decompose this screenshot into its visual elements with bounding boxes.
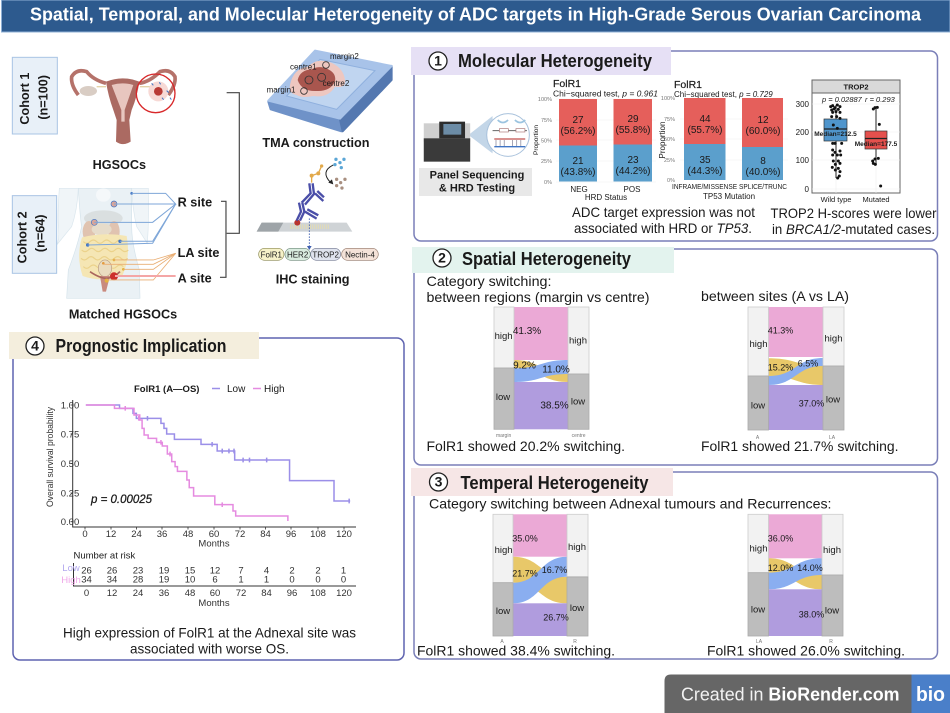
sankey: A vs LA: 15.2%	[768, 362, 793, 372]
sankey: A vs R: 16.7%	[542, 565, 567, 575]
bar chart: FolR1 by HRD status: 75%	[541, 118, 552, 124]
icon: tissue microarray block: margin2	[330, 52, 359, 61]
table: number at risk: 26	[81, 566, 92, 576]
line chart: overall survival	[45, 400, 356, 550]
table: number at risk: Low	[62, 563, 80, 574]
label: panel sequencing and HRD testing	[419, 168, 532, 196]
line chart: overall survival: 0.50	[61, 459, 79, 470]
sankey: A vs R: high	[495, 545, 513, 556]
table: number at risk: 36	[159, 588, 169, 599]
icon: tissue microarray block	[267, 51, 392, 131]
bar chart: FolR1 by HRD status: NEG	[570, 185, 588, 194]
table: number at risk: 84	[261, 588, 272, 599]
heading: molecular heterogeneity: Molecular Heterogeneity	[458, 51, 652, 71]
bar chart: FolR1 by TP53 mutation: (40.0%)	[745, 167, 781, 178]
bar chart: FolR1 by HRD status: 27	[572, 115, 584, 126]
markers: FolR1 HER2 TROP2 Nectin-4: HER2	[287, 250, 309, 259]
box plot: TROP2 H-scores: 100	[796, 156, 810, 165]
label: panel sequencing and HRD testing: Panel Sequencing	[430, 170, 524, 182]
line chart: overall survival: 96	[286, 529, 296, 540]
sankey: margin vs centre: centre	[572, 433, 586, 439]
table: number at risk: 19	[159, 566, 169, 576]
line chart: overall survival: 36	[157, 529, 167, 540]
box plot: TROP2 H-scores: p = 0.02887	[821, 95, 863, 104]
table: number at risk: 1	[264, 574, 269, 586]
bar chart: FolR1 by HRD status: (56.2%)	[560, 126, 596, 137]
sankey: margin vs centre: high	[569, 336, 587, 346]
bar chart: FolR1 by TP53 mutation: 50%	[664, 137, 675, 143]
bar chart: FolR1 by HRD status: Chi−squared test, p = 0.961	[553, 88, 658, 98]
table: number at risk: 108	[310, 588, 326, 599]
line chart: overall survival: 72	[235, 529, 245, 540]
sankey: LA vs R: low	[751, 604, 765, 616]
bar chart: FolR1 by TP53 mutation: 25%	[664, 158, 675, 164]
table: number at risk: 0	[341, 574, 346, 586]
table: number at risk: 7	[238, 566, 244, 576]
cohort 1 label: (n=100)	[36, 75, 50, 120]
panel: study design	[12, 51, 392, 322]
sankey: A vs R: 21.7%	[512, 568, 538, 578]
label: IHC staining: IHC staining	[276, 273, 350, 287]
sankey: margin vs centre: 38.5%	[540, 400, 569, 412]
text: ADC target expression: ADC target expression was not	[572, 204, 755, 220]
bar chart: FolR1 by HRD status: (44.2%)	[615, 166, 651, 177]
line chart: overall survival: 84	[260, 529, 271, 540]
table: number at risk: 96	[287, 588, 297, 599]
bar chart: FolR1 by TP53 mutation: (60.0%)	[745, 126, 781, 137]
markers: FolR1 HER2 TROP2 Nectin-4: FolR1	[261, 250, 283, 259]
table: number at risk: 34	[107, 574, 117, 586]
label: panel sequencing and HRD testing: & HRD Testing	[439, 182, 515, 194]
sankey: A vs LA: LA	[829, 435, 836, 441]
heading: prognostic implication	[9, 332, 259, 359]
text: category switching between regions: between regions (margin vs centre)	[426, 289, 650, 305]
sankey: LA vs R: 12.0%	[768, 563, 793, 573]
sankey: A vs R: 35.0%	[512, 534, 538, 544]
bar chart: FolR1 by TP53 mutation: 8	[760, 156, 766, 167]
table: number at risk: 12	[210, 566, 220, 576]
connector lines to LA site	[103, 253, 176, 280]
icon: uterus with ovarian tumour	[72, 71, 175, 144]
sankey: A vs LA: high	[825, 334, 842, 344]
heading: temperal heterogeneity: 3	[435, 474, 443, 490]
text: worse OS conclusion	[63, 624, 356, 656]
line chart: overall survival: 0	[82, 529, 88, 540]
bar chart: FolR1 by TP53 mutation: TP53 Mutation	[703, 192, 755, 201]
label: HGSOCs: HGSOCs	[93, 158, 146, 172]
cohort 2 label: (n=64)	[33, 214, 47, 252]
table: number at risk: 12	[107, 588, 117, 599]
sankey: LA vs R: low	[825, 606, 839, 616]
text: worse OS conclusion: High expression of FolR1 at the Adnexal site was	[63, 624, 356, 640]
markers: FolR1 HER2 TROP2 Nectin-4	[259, 248, 378, 260]
sankey: A vs R: R	[573, 639, 577, 645]
bar chart: FolR1 by TP53 mutation: 12	[757, 115, 769, 126]
heading: spatial heterogeneity	[412, 247, 674, 273]
box plot: TROP2 H-scores: Mutated	[862, 195, 890, 204]
bar chart: FolR1 by TP53 mutation: INFRAME/MISSENSE SPLICE/TRUNC	[672, 184, 787, 191]
bar chart: FolR1 by TP53 mutation: 35	[699, 155, 711, 166]
legend: FolR1 A-OS	[134, 384, 285, 395]
panel: molecular heterogeneity	[411, 47, 938, 241]
sankey: A vs LA: high	[750, 339, 767, 350]
sankey: A vs R	[493, 514, 588, 645]
table: number at risk: 23	[133, 566, 143, 576]
table: number at risk	[61, 550, 356, 609]
text: category switching adnexal recurrences: Category switching between Adnexal tumours and Recurrences:	[429, 496, 832, 512]
box plot: TROP2 H-scores: 0	[805, 185, 810, 194]
sankey: LA vs R	[748, 514, 843, 645]
table: number at risk: 10	[185, 574, 195, 586]
heading: spatial heterogeneity: Spatial Heterogeneity	[462, 249, 631, 269]
bracket: cohorts to methods	[227, 93, 239, 233]
sankey: A vs LA: 41.3%	[768, 326, 793, 336]
legend: FolR1 A-OS: Low	[227, 384, 246, 395]
panel: prognostic implication	[9, 332, 404, 660]
heading: molecular heterogeneity	[411, 47, 671, 75]
text: between sites: between sites (A vs LA)	[701, 288, 849, 304]
title: Spatial, Temporal, and Molecular Heterogeneity of ADC targets in High-Grade Serous Ovarian Carcinoma	[30, 4, 922, 24]
bar chart: FolR1 by HRD status: 23	[627, 155, 639, 166]
label: R site: R site	[178, 195, 212, 209]
text: category switching between regions: Category switching:	[426, 273, 552, 289]
text: FolR1 21.7% switching: FolR1 showed 21.7% switching.	[701, 438, 898, 454]
bar chart: FolR1 by HRD status: POS	[624, 185, 640, 194]
line chart: overall survival: 24	[131, 529, 142, 540]
table: number at risk: Number at risk	[74, 550, 136, 562]
bar chart: FolR1 by TP53 mutation: Proportion	[658, 122, 667, 158]
heading: spatial heterogeneity: 2	[438, 250, 446, 266]
cohort 1 label	[12, 57, 57, 134]
text: ADC target expression	[572, 204, 755, 236]
sankey: margin vs centre: 41.3%	[513, 326, 541, 337]
table: number at risk: 34	[81, 574, 92, 586]
icon: tissue microarray block: margin1	[267, 86, 296, 95]
bar chart: FolR1 by TP53 mutation: 100%	[661, 96, 675, 102]
table: number at risk: 6	[212, 574, 218, 586]
table: number at risk: 0	[315, 574, 321, 586]
line chart: overall survival: 0.75	[61, 430, 79, 440]
badge: created in BioRender	[664, 674, 950, 713]
bar chart: FolR1 by TP53 mutation: FolR1	[674, 79, 702, 91]
icon: tissue microarray block: centre2	[323, 79, 350, 88]
icon: body with tumour sites	[57, 188, 149, 298]
bar chart: FolR1 by HRD status: (55.8%)	[615, 125, 651, 136]
table: number at risk: 4	[264, 566, 269, 576]
bar chart: FolR1 by HRD status	[533, 78, 658, 202]
line chart: overall survival: 0.25	[61, 488, 79, 500]
heading: molecular heterogeneity: 1	[434, 52, 442, 68]
box plot: TROP2 H-scores: Median=212.5	[814, 131, 857, 138]
line chart: overall survival: 108	[310, 529, 326, 540]
text: TROP2 H-scores	[770, 205, 937, 237]
bar chart: FolR1 by HRD status: Proportion	[533, 125, 540, 155]
sankey: margin vs centre	[494, 307, 589, 439]
box plot: TROP2 H-scores: 200	[796, 128, 810, 137]
sankey: A vs LA: low	[826, 394, 840, 406]
bar chart: FolR1 by TP53 mutation: 75%	[664, 117, 675, 123]
panel: temporal heterogeneity	[411, 468, 938, 659]
text: ADC target expression: associated with HRD or TP53.	[574, 220, 752, 236]
sankey: LA vs R: high	[823, 545, 841, 556]
icon: tissue microarray block: centre1	[290, 62, 317, 71]
line chart: overall survival: 48	[183, 529, 193, 540]
text: TROP2 H-scores: in BRCA1/2-mutated cases.	[772, 221, 935, 237]
box plot: TROP2 H-scores: 300	[796, 100, 810, 109]
bar chart: FolR1 by HRD status: 50%	[541, 138, 552, 144]
table: number at risk: 2	[315, 566, 321, 576]
line chart: overall survival: p = 0.00025	[90, 494, 153, 506]
table: number at risk: 120	[336, 588, 352, 599]
bar chart: FolR1 by HRD status: 21	[572, 156, 584, 167]
sankey: LA vs R: high	[750, 544, 767, 554]
table: number at risk: 15	[185, 566, 195, 576]
bracket: sites	[220, 201, 226, 277]
line chart: overall survival: 120	[336, 529, 352, 540]
line chart: overall survival: 1.00	[61, 400, 79, 412]
text: FolR1 26.0% switching: FolR1 showed 26.0% switching.	[707, 642, 905, 658]
table: number at risk: 72	[236, 588, 246, 599]
text: FolR1 20.2% switching: FolR1 showed 20.2% switching.	[426, 438, 625, 454]
bar chart: FolR1 by HRD status: (43.8%)	[560, 167, 596, 178]
badge: created in BioRender: Created in BioRender.com	[681, 684, 900, 704]
box plot: TROP2 H-scores: TROP2	[843, 82, 869, 92]
table: number at risk: 19	[159, 574, 169, 586]
heading: prognostic implication: Prognostic Implication	[56, 336, 226, 356]
sankey: A vs LA: A	[756, 435, 760, 441]
icon: sequencing instrument	[424, 114, 529, 162]
sankey: margin vs centre: high	[495, 331, 513, 342]
table: number at risk: 48	[185, 588, 195, 599]
text: FolR1 38.4% switching: FolR1 showed 38.4% switching.	[417, 642, 615, 658]
markers: FolR1 HER2 TROP2 Nectin-4: TROP2	[312, 250, 340, 259]
cohort 2 label	[12, 196, 57, 273]
panel: spatial heterogeneity	[412, 247, 938, 465]
table: number at risk: 1	[238, 574, 244, 586]
table: number at risk: 0	[289, 574, 295, 586]
box plot: TROP2 H-scores: r = 0.293	[865, 95, 896, 104]
table: number at risk: Months	[198, 598, 230, 609]
heading: temperal heterogeneity: Temperal Heterogeneity	[460, 473, 648, 493]
bar chart: FolR1 by HRD status: 25%	[541, 159, 552, 165]
sankey: A vs LA: 37.0%	[799, 398, 824, 408]
bar chart: FolR1 by TP53 mutation: 44	[699, 114, 711, 125]
label: A site: A site	[178, 272, 212, 286]
text: worse OS conclusion: associated with worse OS.	[130, 640, 289, 656]
table: number at risk: 26	[107, 566, 117, 576]
table: number at risk: 28	[133, 574, 143, 586]
bar chart: FolR1 by TP53 mutation: Chi−squared test, p = 0.729	[674, 90, 773, 99]
table: number at risk: High	[61, 575, 81, 586]
sankey: A vs LA	[748, 307, 844, 441]
bar chart: FolR1 by HRD status: 100%	[538, 97, 552, 103]
sankey: A vs LA: 6.5%	[798, 358, 818, 368]
sankey: LA vs R: 14.0%	[797, 563, 823, 573]
bar chart: FolR1 by HRD status: 29	[627, 114, 639, 125]
connector lines to R site	[88, 193, 176, 245]
line chart: overall survival: Months	[198, 538, 230, 550]
cohort 1 label: Cohort 1	[18, 73, 32, 125]
legend: FolR1 A-OS: High	[264, 384, 285, 395]
sankey: margin vs centre: 11.0%	[542, 364, 570, 376]
cohort 2 label: Cohort 2	[16, 211, 30, 263]
legend: FolR1 A-OS: FolR1 (A—OS)	[134, 384, 199, 395]
line chart: overall survival: 60	[209, 529, 219, 540]
badge: created in BioRender: bio	[916, 684, 945, 706]
line chart: overall survival: 12	[106, 529, 116, 540]
sankey: A vs R: 26.7%	[543, 612, 569, 622]
bar chart: FolR1 by TP53 mutation: (44.3%)	[687, 166, 723, 177]
heading: prognostic implication: 4	[31, 338, 39, 354]
label: TMA construction: TMA construction	[262, 136, 370, 150]
markers: FolR1 HER2 TROP2 Nectin-4: Nectin-4	[345, 250, 375, 259]
sankey: LA vs R: R	[829, 639, 833, 645]
bar chart: FolR1 by HRD status: FolR1	[553, 78, 581, 90]
line chart: overall survival: 0.00	[61, 517, 79, 528]
icon: IHC antibody on slide	[257, 158, 352, 250]
sankey: A vs R: low	[570, 603, 584, 614]
bar chart: FolR1 by HRD status: 0%	[544, 180, 552, 186]
sankey: A vs R: low	[496, 606, 510, 617]
line chart: overall survival: Overall survival probability	[45, 407, 56, 507]
table: number at risk: 60	[210, 588, 220, 599]
sankey: LA vs R: 38.0%	[799, 610, 824, 620]
title	[2, 0, 950, 32]
label: LA site: LA site	[178, 246, 219, 260]
sankey: margin vs centre: low	[496, 392, 510, 403]
bar chart: FolR1 by HRD status: HRD Status	[585, 193, 627, 202]
table: number at risk: 0	[84, 588, 89, 599]
table: number at risk: 24	[133, 588, 143, 599]
label: Matched HGSOCs: Matched HGSOCs	[69, 308, 177, 322]
sankey: LA vs R: 36.0%	[768, 534, 793, 544]
table: number at risk: 2	[289, 566, 295, 576]
text: TROP2 H-scores: TROP2 H-scores were lower	[770, 205, 937, 221]
sankey: margin vs centre: 9.2%	[513, 360, 536, 372]
table: number at risk: 1	[341, 566, 346, 576]
heading: temperal heterogeneity	[411, 468, 673, 496]
sankey: A vs LA: low	[751, 400, 765, 412]
sankey: LA vs R: LA	[756, 639, 763, 645]
connector line to A site	[115, 273, 176, 279]
sankey: margin vs centre: margin	[496, 433, 511, 439]
sankey: A vs R: A	[500, 639, 504, 645]
box plot: TROP2 H-scores: Median=177.5	[855, 141, 898, 148]
bar chart: FolR1 by TP53 mutation: 0%	[667, 178, 675, 184]
box plot: TROP2 H-scores: Wild type	[821, 195, 851, 204]
bar chart: FolR1 by TP53 mutation	[658, 79, 788, 201]
bar chart: FolR1 by TP53 mutation: (55.7%)	[687, 125, 723, 136]
sankey: margin vs centre: low	[571, 396, 585, 408]
box plot: TROP2 H-scores	[796, 80, 900, 204]
sankey: A vs R: high	[568, 542, 586, 553]
text: category switching between regions	[426, 273, 650, 305]
